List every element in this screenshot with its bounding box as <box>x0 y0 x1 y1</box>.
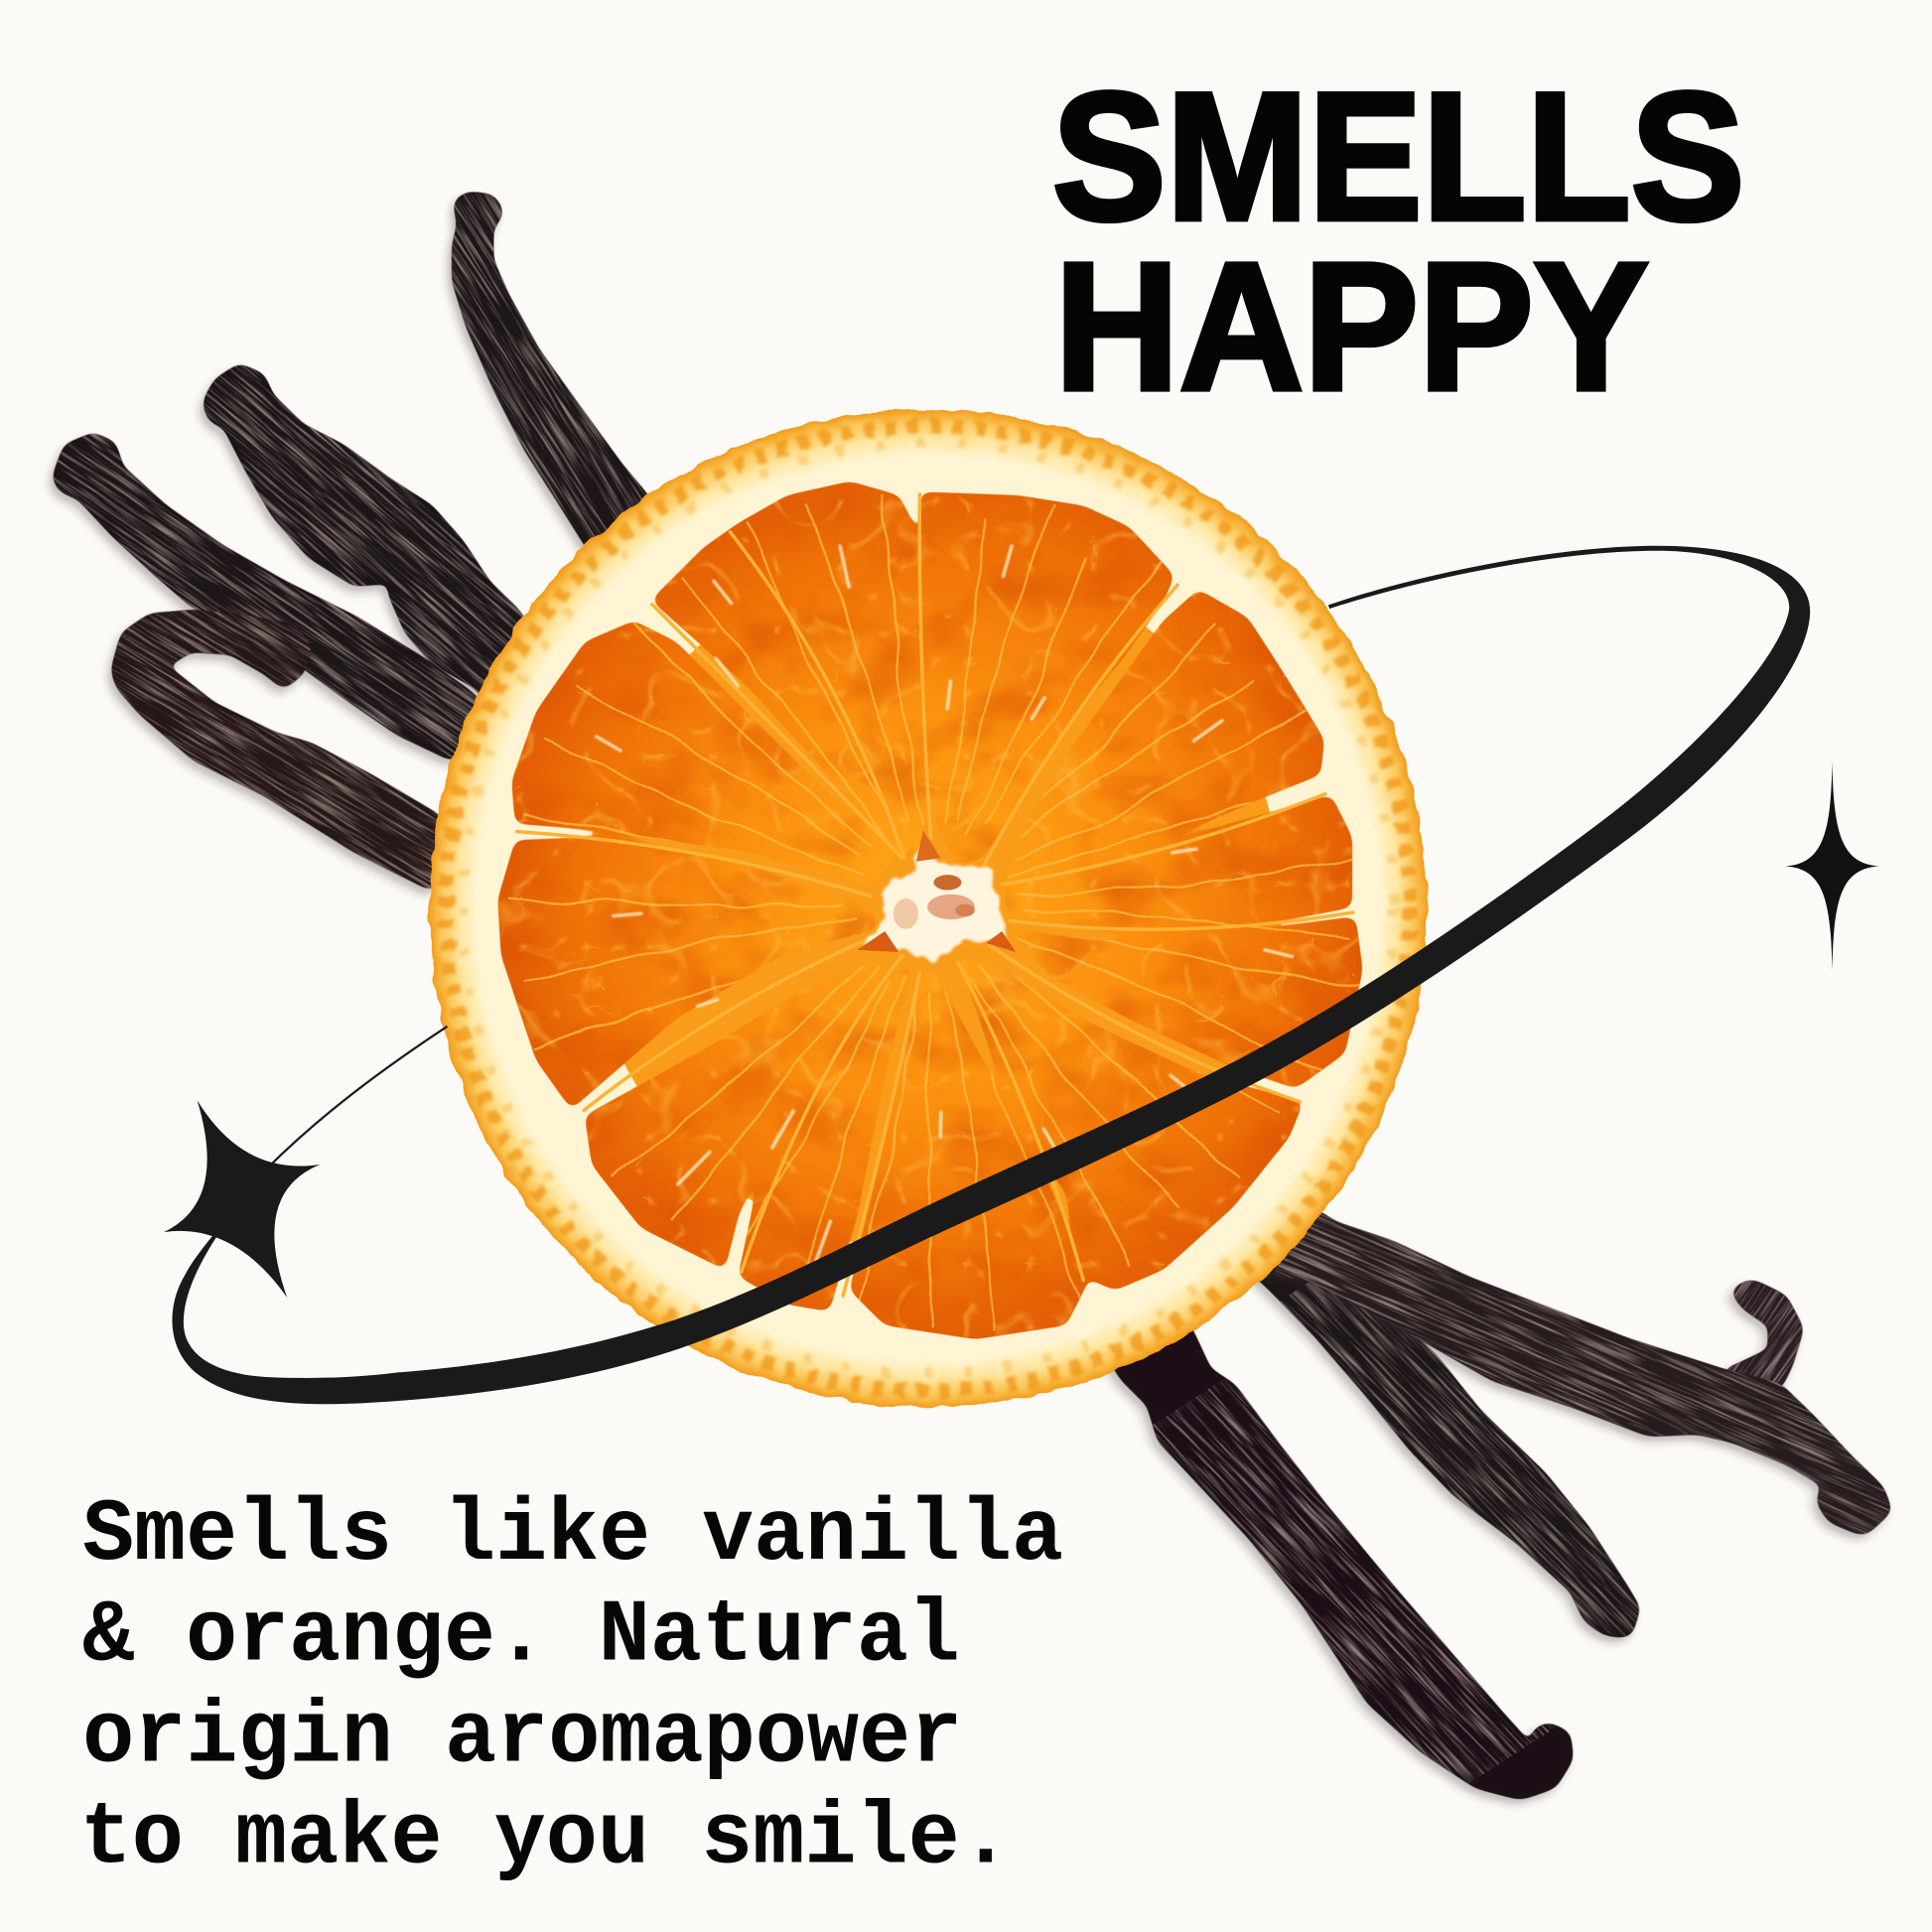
body line 2: & orange. Natural <box>82 1587 960 1687</box>
vanilla bean: fat middle <box>196 364 524 697</box>
vanilla bean: top right <box>1198 1117 1932 1661</box>
vanilla bean: lower left <box>1085 1250 1753 1818</box>
orbit ring <box>172 546 1810 1404</box>
pulp web veins <box>467 447 1401 1381</box>
orange centre pith <box>857 830 1016 961</box>
orange slice <box>429 409 1427 1407</box>
orange segments <box>498 482 1362 1339</box>
pulp texture <box>467 447 1401 1381</box>
juice highlights <box>596 545 1293 1261</box>
body line 4: to make you smile. <box>80 1788 1012 1888</box>
segment membranes <box>517 494 1353 1296</box>
vanilla bean: long left <box>46 433 477 770</box>
title <box>1052 55 1744 428</box>
body text <box>80 1485 1063 1888</box>
title line 2: HAPPY <box>1054 224 1649 428</box>
vanilla bean: middle <box>1128 1180 1798 1748</box>
ring: tapered band <box>172 546 1810 1404</box>
body line 3: origin aromapower <box>82 1687 962 1787</box>
pulp radial veins <box>508 495 1358 1331</box>
vanilla beans: lower right cluster <box>1085 1117 1932 1818</box>
vanilla bean: curled tail <box>1645 1242 1888 1435</box>
vanilla beans: upper left cluster <box>46 191 647 899</box>
ring: thin back arc <box>266 1027 448 1170</box>
body line 1: Smells like vanilla <box>82 1485 1063 1586</box>
orange rind and pith <box>429 409 1427 1407</box>
title line 1: SMELLS <box>1052 55 1744 258</box>
vanilla bean: hooked <box>103 610 439 899</box>
vanilla bean: top <box>443 191 647 553</box>
rind oil dots <box>446 426 1410 1390</box>
membrane underlay <box>585 555 1282 1252</box>
icon: small four-point star <box>1785 761 1879 971</box>
icon: large four-point star <box>164 1100 321 1298</box>
